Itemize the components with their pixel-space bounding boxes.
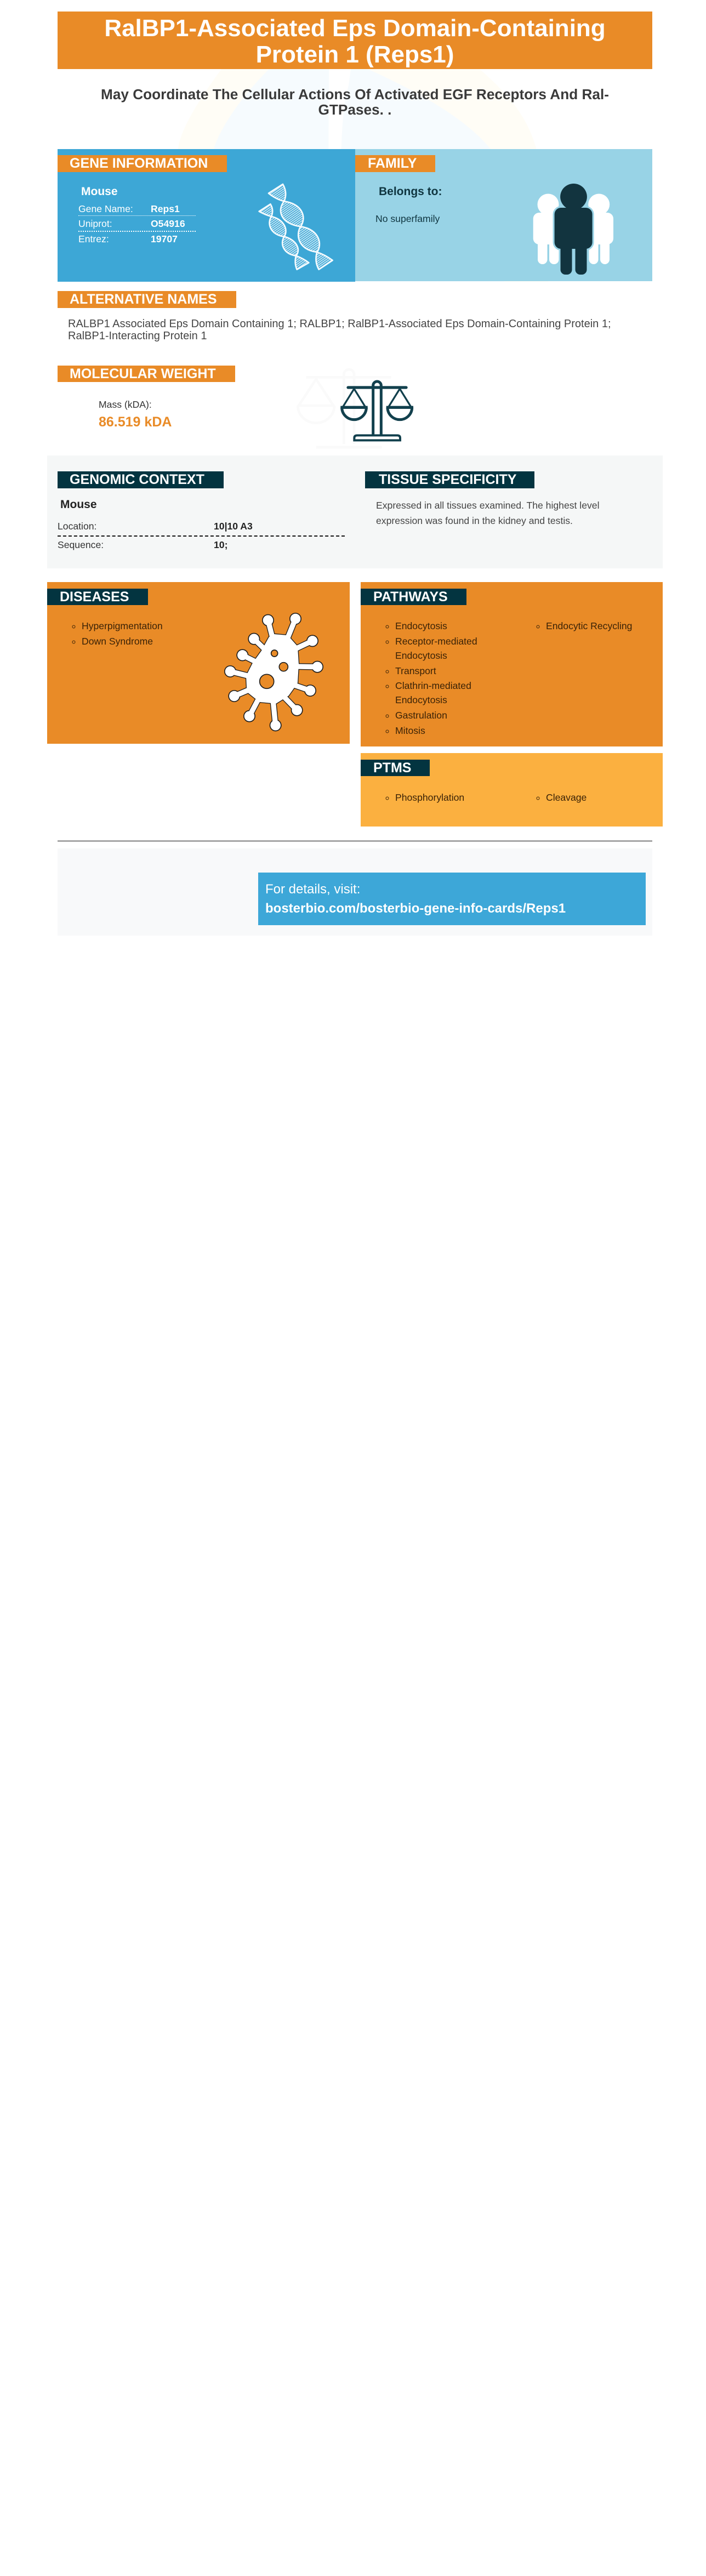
panel: gene information bbox=[58, 149, 355, 282]
heading: PTMs bbox=[361, 760, 430, 776]
subtitle bbox=[101, 86, 609, 118]
heading: family bbox=[355, 155, 435, 172]
gene table: Gene Name: bbox=[78, 203, 133, 214]
disease list: Hyperpigmentation bbox=[82, 620, 163, 631]
heading: gene information: GENE INFORMATION bbox=[70, 156, 208, 171]
heading: pathways bbox=[361, 589, 466, 605]
gene table: O54916 bbox=[151, 218, 185, 229]
pathway list column 1 bbox=[386, 620, 477, 736]
heading: genomic context: GENOMIC CONTEXT bbox=[70, 472, 204, 487]
callout url: bosterbio.com/bosterbio-gene-info-cards/Reps1 bbox=[265, 901, 566, 916]
PTM list column 1: Phosphorylation bbox=[395, 792, 464, 803]
subtitle: May Coordinate The Cellular Actions Of Activated EGF Receptors And Ral- bbox=[101, 86, 609, 102]
title banner: RalBP1-Associated Eps Domain-Containing bbox=[104, 15, 606, 42]
panel: family bbox=[355, 149, 652, 281]
alternative names text: RALBP1 Associated Eps Domain Containing 1; RALBP1; RalBP1-Associated Eps Domain-Containing Protein 1; bbox=[68, 318, 611, 330]
heading: molecular weight: MOLECULAR WEIGHT bbox=[70, 366, 216, 381]
heading: tissue specificity: TISSUE SPECIFICITY bbox=[379, 472, 516, 487]
panel: PTMs bbox=[361, 753, 663, 827]
disease list bbox=[72, 620, 163, 647]
pathway list column 1: Clathrin-mediated bbox=[395, 680, 471, 691]
panel: diseases bbox=[47, 582, 350, 744]
species label: Mouse bbox=[81, 185, 118, 198]
genomic table: Location: bbox=[58, 521, 96, 532]
gene table: Reps1 bbox=[151, 203, 180, 214]
gene table: 19707 bbox=[151, 233, 178, 244]
tissue specificity text: Expressed in all tissues examined. The highest level bbox=[376, 500, 599, 511]
callout label: For details, visit: bbox=[265, 882, 360, 897]
genomic table: 10; bbox=[214, 539, 227, 550]
icon: virus bbox=[224, 613, 323, 731]
pathway list column 1: Mitosis bbox=[395, 725, 425, 736]
pathway list column 1: Transport bbox=[395, 665, 436, 676]
icon: balance scale bbox=[340, 380, 413, 442]
heading: PTMs: PTMS bbox=[373, 760, 411, 776]
tissue specificity text: expression was found in the kidney and testis. bbox=[376, 515, 573, 526]
pathway list column 1: Gastrulation bbox=[395, 710, 447, 721]
panel: pathways bbox=[361, 582, 663, 746]
pathway list column 1: Endocytosis bbox=[395, 620, 447, 631]
title banner bbox=[58, 12, 652, 69]
belongs to label: Belongs to: bbox=[379, 185, 442, 198]
genomic table bbox=[58, 521, 345, 550]
pathway list column 1: Endocytosis bbox=[395, 650, 447, 661]
heading: diseases: DISEASES bbox=[60, 589, 129, 605]
species label: Mouse bbox=[60, 498, 97, 511]
subtitle: GTPases. . bbox=[318, 101, 391, 118]
heading: pathways: PATHWAYS bbox=[373, 589, 448, 605]
panel: footer bbox=[58, 848, 652, 936]
genomic table: Sequence: bbox=[58, 539, 104, 550]
tissue specificity text bbox=[376, 500, 599, 526]
gene table: Uniprot: bbox=[78, 218, 112, 229]
alternative names text bbox=[68, 318, 611, 342]
pathway list column 1: Receptor-mediated bbox=[395, 636, 477, 647]
icon: people group bbox=[533, 184, 613, 275]
gene table bbox=[78, 203, 196, 244]
superfamily value: No superfamily bbox=[375, 213, 440, 224]
watermark logo bbox=[178, 69, 548, 282]
genomic table: 10|10 A3 bbox=[214, 521, 253, 532]
disease list: Down Syndrome bbox=[82, 636, 153, 647]
heading: family: FAMILY bbox=[368, 156, 417, 171]
alternative names text: RalBP1-Interacting Protein 1 bbox=[68, 330, 207, 342]
pathway list column 2: Endocytic Recycling bbox=[546, 620, 632, 631]
heading: diseases bbox=[47, 589, 148, 605]
panel: genomic context and tissue specificity bbox=[47, 455, 663, 568]
heading: alternative names: ALTERNATIVE NAMES bbox=[70, 292, 217, 307]
mass value: 86.519 kDA bbox=[99, 414, 172, 430]
icon: DNA strands bbox=[258, 183, 333, 271]
title banner: Protein 1 (Reps1) bbox=[256, 41, 454, 68]
mass label: Mass (kDA): bbox=[99, 399, 152, 410]
callout: details link bbox=[258, 873, 646, 925]
PTM list column 2: Cleavage bbox=[546, 792, 587, 803]
pathway list column 1: Endocytosis bbox=[395, 694, 447, 705]
gene table: Entrez: bbox=[78, 233, 109, 244]
